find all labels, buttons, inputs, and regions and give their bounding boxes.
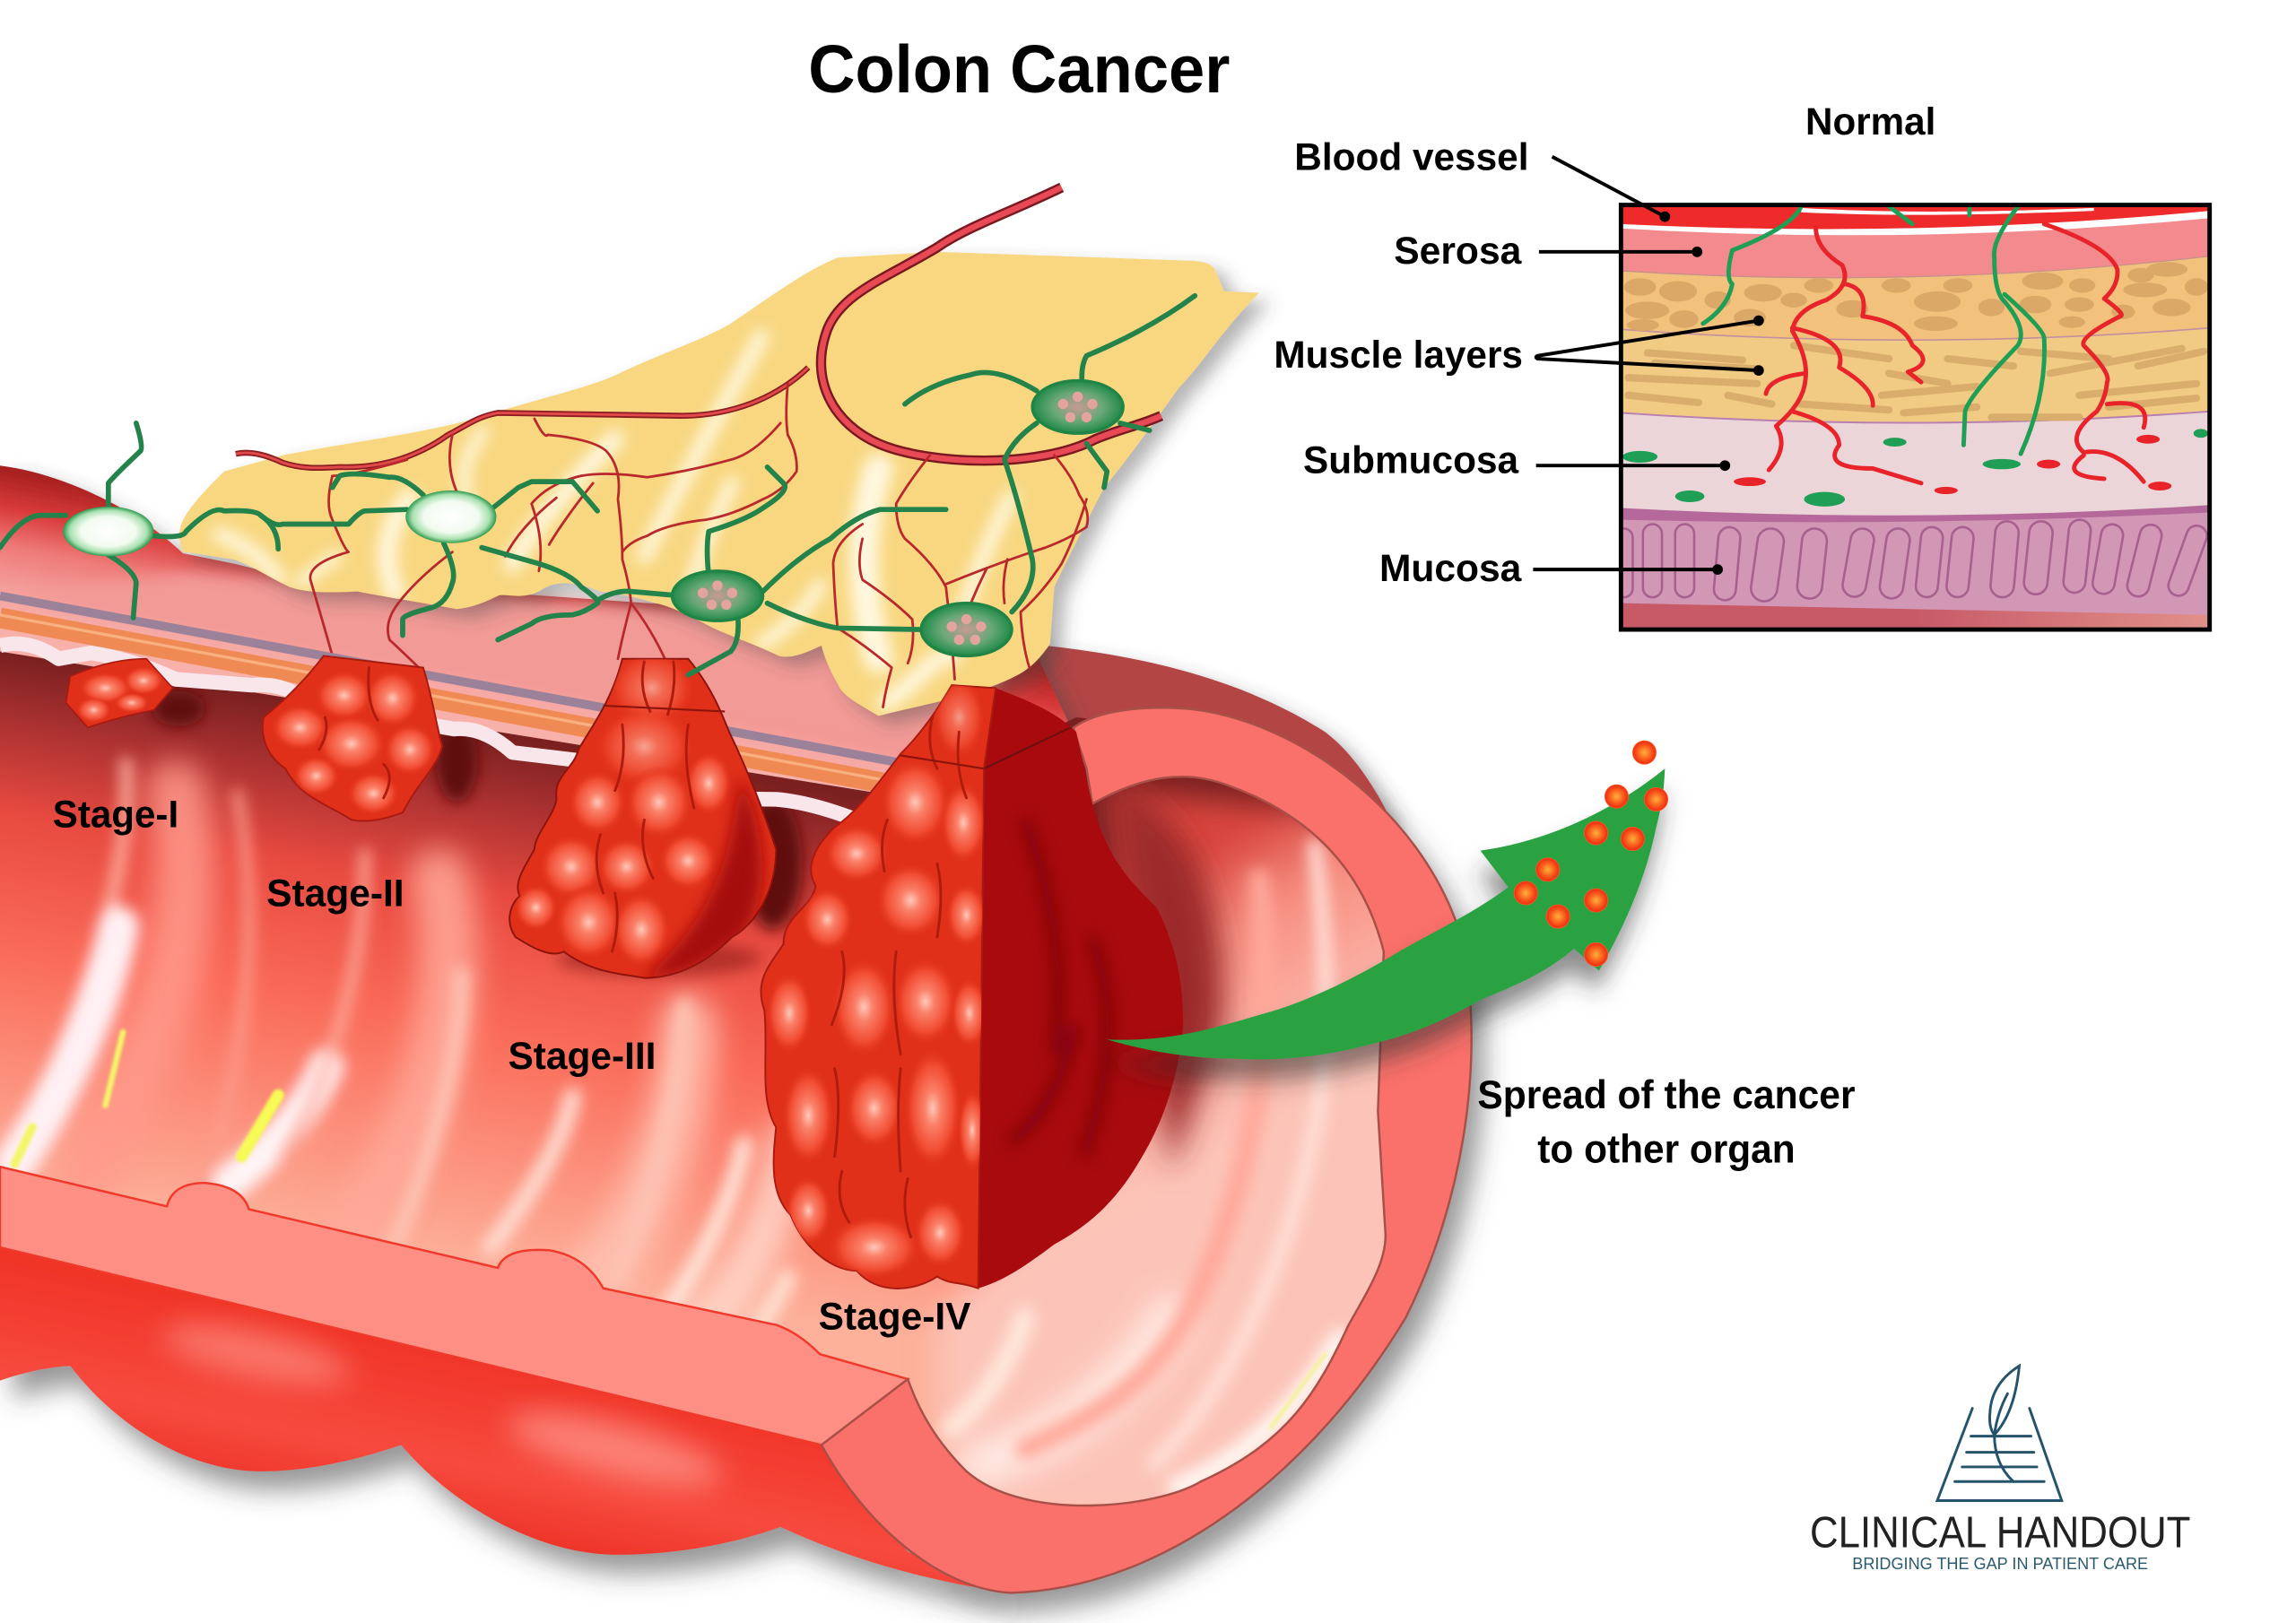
label: submucosa: Submucosa: [1303, 438, 1518, 481]
label: serosa: [1394, 230, 1702, 272]
submucosa vessel fragments: [1622, 429, 2208, 507]
panel: normal colon wall: [1615, 100, 2210, 629]
tumor cast shadows: [152, 691, 803, 976]
stage labels: Stage-I: [53, 793, 178, 835]
spread arrow: [1107, 768, 1665, 1059]
spread caption: Spread of the cancer: [1477, 1073, 1856, 1117]
title: Colon Cancer: [808, 31, 1230, 107]
mesentery fatty tissue: [179, 252, 1259, 716]
stage labels: Stage-IV: [819, 1295, 971, 1337]
panel border: [1621, 205, 2210, 629]
label: submucosa: [1303, 438, 1730, 481]
green lymph vessels: [1703, 206, 2045, 454]
red blood vessels: [1766, 224, 2145, 483]
logo wordmark: CLINICAL HANDOUT: [1810, 1509, 2190, 1558]
tumor: stage I: [65, 659, 173, 727]
outer back wall of colon (dark band): [996, 641, 1391, 879]
circular muscle blobs: [1624, 262, 2208, 331]
cancer cells dots: [1514, 741, 1668, 967]
lymph vessels: [0, 296, 1195, 675]
outer lobes of colon: [0, 1247, 1011, 1593]
ring cross-section of colon: [822, 707, 1472, 1593]
label: mucosa: [1379, 547, 1723, 589]
label: muscle layers: Muscle layers: [1274, 334, 1523, 376]
label: mucosa: Mucosa: [1379, 547, 1522, 589]
spread caption: [1477, 1073, 1856, 1171]
heading: normal: Normal: [1805, 100, 1935, 143]
stage labels: Stage-III: [509, 1035, 656, 1077]
logo tagline: BRIDGING THE GAP IN PATIENT CARE: [1852, 1554, 2148, 1573]
flat cut strip of colon wall: [0, 1167, 908, 1445]
lumen interior: [0, 652, 1421, 1523]
upper colon wall: [0, 465, 1076, 798]
label: muscle layers: [1274, 316, 1764, 376]
spread caption: to other organ: [1537, 1127, 1796, 1171]
main artery: [236, 187, 1161, 468]
label: serosa: Serosa: [1394, 230, 1522, 272]
colon illustration: [0, 187, 1472, 1593]
tumor: stage II: [263, 655, 442, 821]
label: blood vessel: [1294, 135, 1670, 222]
small branching blood vessels: [310, 384, 1088, 707]
wall layers band: [0, 596, 908, 823]
mucosal crypts: [1615, 518, 2210, 603]
lymph nodes: [63, 381, 1123, 655]
icon: book and quill: [1937, 1366, 2062, 1500]
wall layers: [1621, 205, 2210, 629]
tumor: stage IV surface: [761, 676, 996, 1289]
longitudinal muscle stripes: [1629, 345, 2204, 417]
tumor: stage IV dark cut half: [978, 688, 1183, 1289]
tumor: stage III: [509, 650, 776, 979]
stage labels: Stage-II: [266, 872, 404, 915]
stage labels: [53, 793, 971, 1337]
label: blood vessel: Blood vessel: [1294, 135, 1528, 178]
logo: clinical handout: [1810, 1366, 2190, 1573]
ring silhouette casting shadow: [822, 707, 1472, 1593]
right-side lumen shading: [937, 791, 1421, 1523]
lobe highlights: [158, 1312, 728, 1501]
